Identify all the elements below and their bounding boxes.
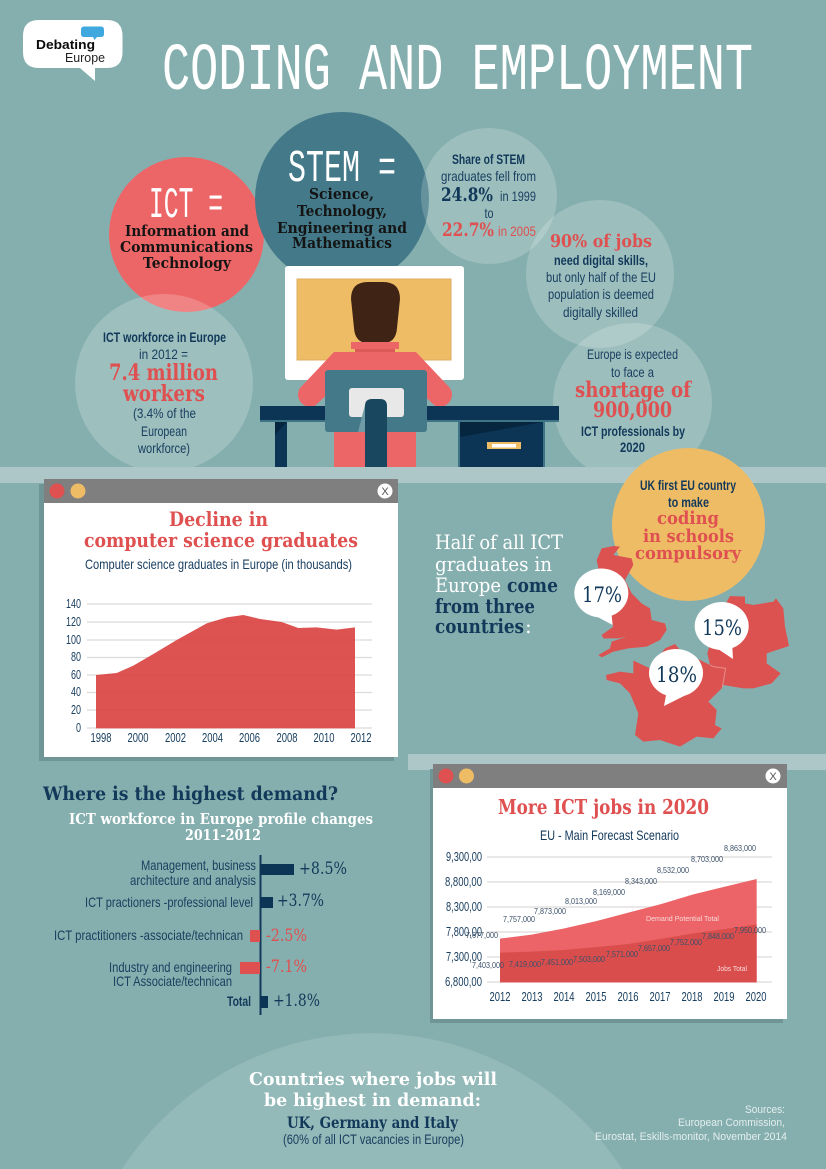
bottom-right divider band xyxy=(408,754,826,770)
panel: ICT workforce circle: (3.4% of the xyxy=(133,405,196,421)
panel: STEM definition circle: Mathematics xyxy=(292,234,392,252)
callout: UK 17% xyxy=(574,568,628,625)
panel: decline in computer science graduates window: X xyxy=(381,486,389,498)
panel: decline in computer science graduates window: Decline in xyxy=(169,507,268,531)
area chart: graduates 1998-2012: 2008 xyxy=(276,730,298,745)
area chart: forecast scenario: 7,419,000 xyxy=(509,959,541,969)
panel: decline in computer science graduates window: Computer science graduates in Europe (in thousands) xyxy=(85,556,352,572)
area chart: forecast scenario: 7,571,000 xyxy=(606,949,638,959)
callout: UK coding in schools circle: coding xyxy=(657,508,719,529)
area chart: forecast scenario: 7,300,00 xyxy=(446,949,482,964)
area chart: forecast scenario: 8,532,000 xyxy=(657,865,689,875)
area chart: graduates 1998-2012: 40 xyxy=(71,684,81,699)
panel: digital skills circle: need digital skills, xyxy=(554,252,648,268)
subheading xyxy=(69,810,373,844)
bar chart: workforce profile changes: +1.8% xyxy=(273,991,320,1011)
area chart: forecast scenario: Jobs Total xyxy=(717,966,747,973)
bar chart: workforce profile changes: +3.7% xyxy=(277,891,324,911)
area chart: forecast scenario: 2016 xyxy=(618,989,638,1004)
panel: ICT definition circle xyxy=(109,157,264,312)
callout: UK coding in schools circle: compulsory xyxy=(635,543,741,564)
area chart: forecast scenario: 7,800,00 xyxy=(446,924,482,939)
panel: ICT workforce circle: European xyxy=(141,423,187,439)
callout: France 18%: 18% xyxy=(656,663,697,687)
area chart: forecast scenario: 7,752,000 xyxy=(670,937,702,947)
bar chart: workforce profile changes: -2.5% xyxy=(266,926,307,946)
area chart: graduates 1998-2012: 2004 xyxy=(202,730,223,745)
area chart: graduates 1998-2012: 2010 xyxy=(314,730,334,745)
text block: half of ICT graduates: graduates in xyxy=(435,552,552,576)
area chart: forecast scenario: 7,657,000 xyxy=(638,943,670,953)
panel: decline in computer science graduates window xyxy=(39,479,398,761)
panel: countries with highest demand xyxy=(122,1033,622,1169)
panel: digital skills circle: 90% of jobs xyxy=(550,231,652,252)
panel: more ICT jobs in 2020 window: EU - Main Forecast Scenario xyxy=(540,827,679,843)
panel: skills shortage circle: to face a xyxy=(611,364,654,380)
panel: skills shortage circle: ICT professionals by xyxy=(581,423,685,439)
area chart: forecast scenario: 8,169,000 xyxy=(593,887,625,897)
area chart: forecast scenario: 7,873,000 xyxy=(534,906,566,916)
area chart: graduates 1998-2012: 2006 xyxy=(239,730,260,745)
text block: half of ICT graduates: Half of all ICT xyxy=(435,530,564,554)
panel: STEM definition circle: Engineering and xyxy=(277,219,407,237)
area chart: forecast scenario: 2015 xyxy=(586,989,606,1004)
panel: countries with highest demand: be highest in demand: xyxy=(264,1090,481,1111)
panel: skills shortage circle xyxy=(553,323,712,482)
area chart: graduates 1998-2012: 120 xyxy=(66,614,81,629)
area chart: forecast scenario: 7,677,000 xyxy=(466,930,498,940)
area chart: graduates 1998-2012: 60 xyxy=(71,667,81,682)
area chart: forecast scenario: 7,503,000 xyxy=(573,954,605,964)
callout: France 18% xyxy=(649,649,703,706)
panel: STEM definition circle xyxy=(255,112,429,286)
top divider band xyxy=(0,467,826,483)
text block: half of ICT graduates: countries xyxy=(435,614,524,638)
panel: digital skills circle xyxy=(526,200,674,348)
bar chart: workforce profile changes: -7.1% xyxy=(266,957,307,977)
panel: ICT definition circle: ICT = xyxy=(149,181,223,231)
area chart: forecast scenario: 2013 xyxy=(522,989,542,1004)
area chart: graduates 1998-2012: 80 xyxy=(71,649,81,664)
bar chart: workforce profile changes: Industry and engineering xyxy=(109,959,232,975)
area chart: graduates 1998-2012: 0 xyxy=(76,720,81,735)
panel: decline in computer science graduates window: computer science graduates xyxy=(84,528,358,552)
text block: sources: European Commission, xyxy=(678,1117,785,1129)
panel: ICT workforce circle xyxy=(75,294,253,472)
text block: half of ICT graduates xyxy=(435,530,564,638)
area chart: forecast scenario: Demand Potential Total xyxy=(646,916,719,923)
panel: more ICT jobs in 2020 window: More ICT jobs in 2020 xyxy=(498,795,709,819)
panel: digital skills circle: but only half of the EU xyxy=(546,269,656,285)
callout: UK coding in schools circle: to make xyxy=(668,494,709,510)
panel: skills shortage circle: shortage of xyxy=(575,377,693,402)
area chart: forecast scenario: 2020 xyxy=(746,989,766,1004)
callout: UK coding in schools circle: UK first EU country xyxy=(640,477,736,493)
logo: Debating Europe: Europe xyxy=(65,51,105,65)
text block: sources: Sources: xyxy=(745,1104,785,1116)
panel: countries with highest demand: UK, Germany and Italy xyxy=(287,1113,459,1132)
panel: share of STEM graduates circle xyxy=(421,128,557,264)
area chart: forecast scenario: 7,757,000 xyxy=(503,914,535,924)
panel: digital skills circle: digitally skilled xyxy=(563,304,638,320)
map: UK, France and Germany with percentages xyxy=(574,546,789,747)
subheading: ICT workforce in Europe profile changes xyxy=(69,810,373,828)
text block: sources: Eurostat, Eskills-monitor, November 2014 xyxy=(595,1131,787,1143)
text block: half of ICT graduates: Europe xyxy=(435,573,501,597)
subheading: 2011-2012 xyxy=(185,826,261,844)
area chart: forecast scenario: 2017 xyxy=(650,989,670,1004)
area chart: forecast scenario: 8,863,000 xyxy=(724,843,756,853)
panel: share of STEM graduates circle: in 2005 xyxy=(498,223,536,239)
area chart: forecast scenario: 7,403,000 xyxy=(472,960,504,970)
panel: share of STEM graduates circle: Share of STEM xyxy=(452,151,525,167)
panel: where is the highest demand xyxy=(42,783,373,1015)
illustration: person coding at a desk xyxy=(260,266,559,467)
panel: share of STEM graduates circle: 22.7% xyxy=(442,219,494,241)
panel: share of STEM graduates circle: to xyxy=(484,205,494,221)
area chart: graduates 1998-2012: 100 xyxy=(66,632,81,647)
panel: STEM definition circle: Technology, xyxy=(297,202,387,220)
panel: share of STEM graduates circle: 24.8% xyxy=(441,184,493,206)
area chart: forecast scenario: 8,800,00 xyxy=(445,874,482,889)
area chart: graduates 1998-2012: 2002 xyxy=(165,730,186,745)
panel: countries with highest demand: Countries where jobs will xyxy=(249,1069,497,1090)
panel: STEM definition circle: Science, xyxy=(309,185,374,203)
area chart: forecast scenario: 8,703,000 xyxy=(691,854,723,864)
area chart: forecast scenario: 2019 xyxy=(714,989,734,1004)
panel: ICT definition circle: Technology xyxy=(143,254,232,272)
area chart: forecast scenario: 7,848,000 xyxy=(702,931,734,941)
panel: share of STEM graduates circle: graduates fell from xyxy=(441,168,536,184)
panel: ICT workforce circle: 7.4 million xyxy=(109,360,218,386)
heading: Where is the highest demand? xyxy=(42,783,338,805)
panel: ICT workforce circle: in 2012 = xyxy=(139,346,188,362)
area chart: forecast scenario: 7,950,000 xyxy=(734,925,766,935)
bar chart: workforce profile changes: Management, business xyxy=(141,857,256,873)
area chart: graduates 1998-2012: 1998 xyxy=(90,730,112,745)
area chart: forecast scenario: 2012 xyxy=(490,989,510,1004)
panel: ICT workforce circle: workers xyxy=(122,381,205,407)
panel: digital skills circle: population is deemed xyxy=(548,286,654,302)
area chart: forecast scenario: 8,300,00 xyxy=(446,899,482,914)
panel: ICT workforce circle: workforce) xyxy=(137,440,190,456)
callout: UK coding in schools circle: in schools xyxy=(643,526,734,547)
area chart: forecast scenario: 6,800,00 xyxy=(445,974,482,989)
panel: ICT workforce circle: ICT workforce in Europe xyxy=(103,329,226,345)
panel: more ICT jobs in 2020 window: X xyxy=(769,771,777,783)
panel: skills shortage circle: 900,000 xyxy=(593,397,672,422)
area chart: forecast scenario: 8,343,000 xyxy=(625,876,657,886)
area chart: forecast scenario: 9,300,00 xyxy=(446,849,482,864)
panel: skills shortage circle: 2020 xyxy=(620,439,645,455)
bar chart: workforce profile changes: ICT Associate/technican xyxy=(113,973,232,989)
panel: countries with highest demand: (60% of all ICT vacancies in Europe) xyxy=(283,1131,464,1147)
callout: UK coding in schools circle xyxy=(612,448,765,601)
panel: ICT definition circle: Information and xyxy=(125,222,249,240)
area chart: forecast scenario: 8,013,000 xyxy=(565,896,597,906)
area chart: graduates 1998-2012: 140 xyxy=(66,596,81,611)
area chart: graduates 1998-2012 xyxy=(66,596,372,745)
panel: ICT definition circle: Communications xyxy=(120,238,253,256)
text block: half of ICT graduates: from three xyxy=(435,594,535,618)
bar chart: workforce profile changes: Total xyxy=(227,993,251,1009)
text block: half of ICT graduates: come xyxy=(507,573,558,597)
callout: UK 17%: 17% xyxy=(582,583,622,607)
bar chart: workforce profile changes: ICT practitioners -associate/technican xyxy=(54,927,243,943)
callout: Germany 15% xyxy=(695,602,749,659)
area chart: forecast scenario: 7,451,000 xyxy=(541,957,573,967)
bar chart: workforce profile changes: ICT practioners -professional level xyxy=(85,894,253,910)
callout: Germany 15%: 15% xyxy=(702,616,742,640)
text block: sources xyxy=(595,1104,787,1143)
area chart: graduates 1998-2012: 2000 xyxy=(128,730,148,745)
bar chart: workforce profile changes xyxy=(54,855,347,1015)
area chart: forecast scenario xyxy=(445,843,772,1004)
area chart: graduates 1998-2012: 20 xyxy=(71,702,81,717)
bar chart: workforce profile changes: architecture and analysis xyxy=(130,872,256,888)
panel: STEM definition circle: STEM = xyxy=(288,144,396,195)
panel: share of STEM graduates circle: in 1999 xyxy=(500,188,536,204)
bar chart: workforce profile changes: +8.5% xyxy=(299,859,347,879)
logo: Debating Europe xyxy=(23,20,122,81)
panel: skills shortage circle: Europe is expected xyxy=(587,346,678,362)
panel: more ICT jobs in 2020 window xyxy=(430,764,787,1023)
area chart: graduates 1998-2012: 2012 xyxy=(350,730,372,745)
logo: Debating Europe: Debating xyxy=(36,37,95,52)
area chart: forecast scenario: 2018 xyxy=(682,989,702,1004)
area chart: forecast scenario: 2014 xyxy=(554,989,574,1004)
text block: half of ICT graduates: : xyxy=(525,614,532,638)
